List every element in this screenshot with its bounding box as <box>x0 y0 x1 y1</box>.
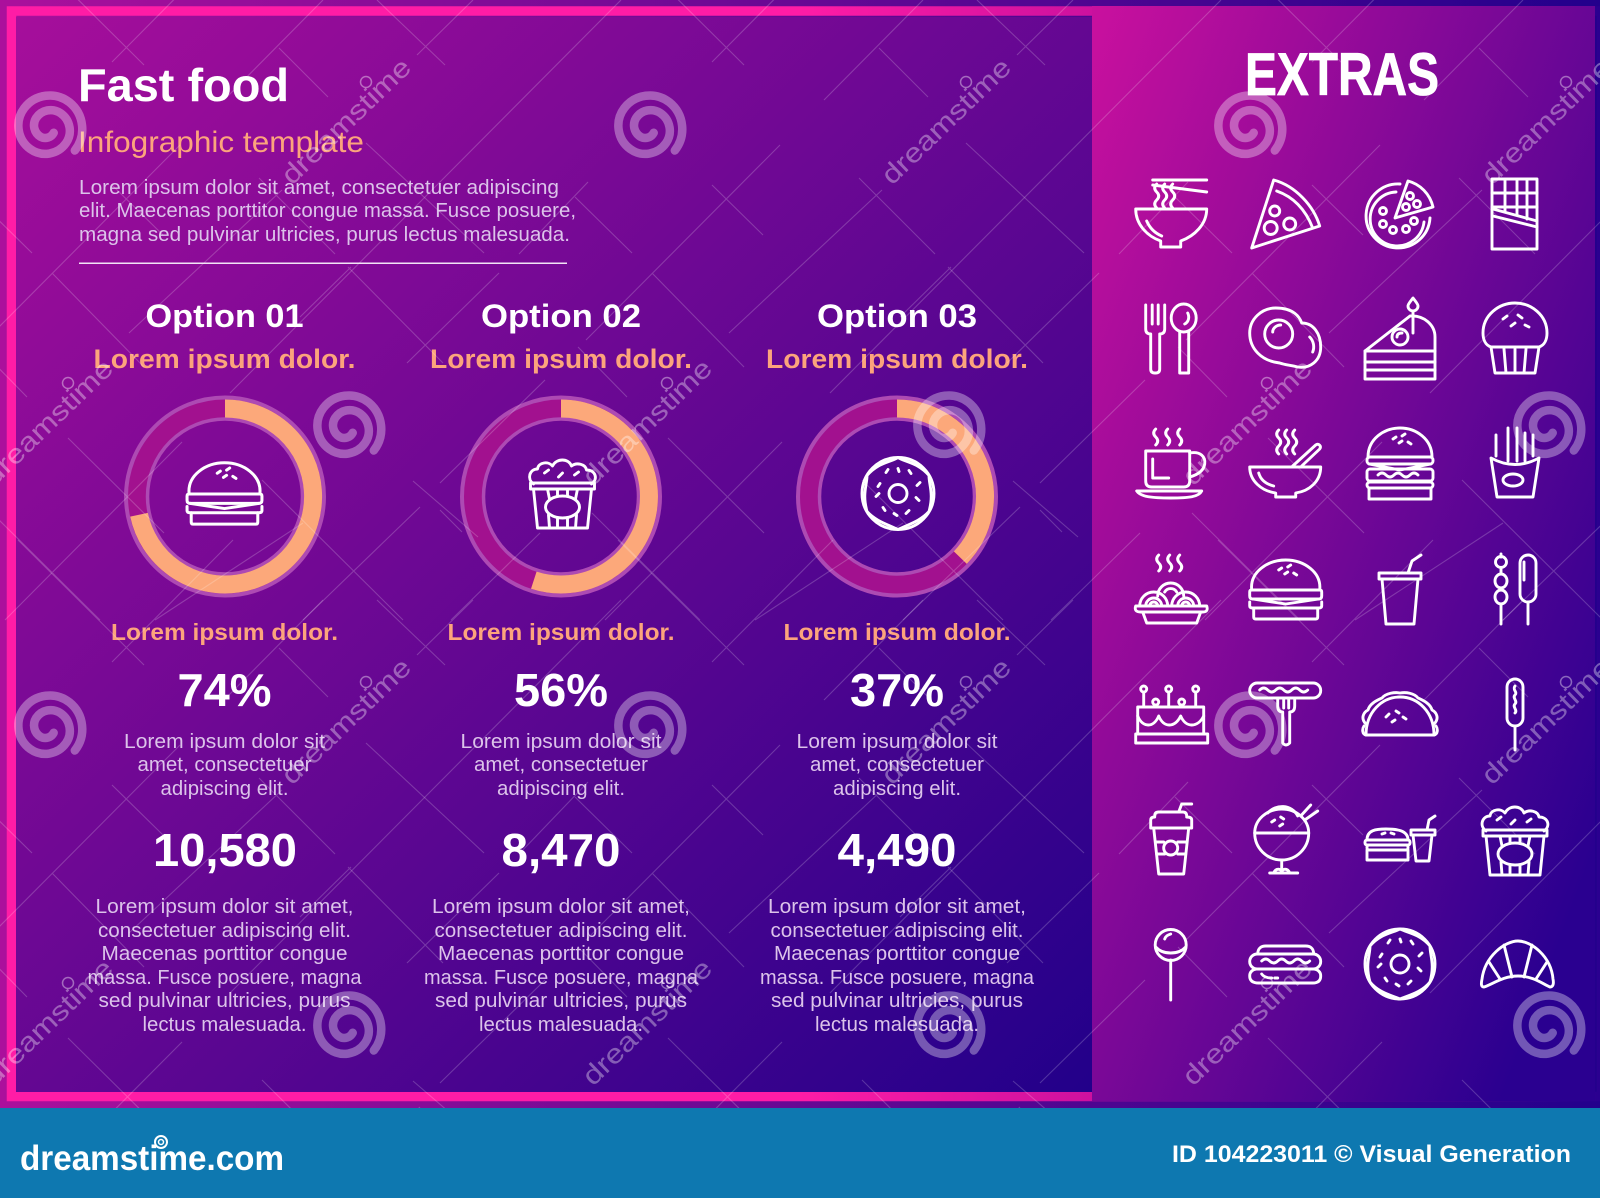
icon: chocolate bar <box>1492 179 1537 249</box>
panel: option 02 <box>424 298 699 1036</box>
option 01 caption: Lorem ipsum dolor. <box>111 619 338 645</box>
option 01 long text: sed pulvinar ultricies, purus <box>98 990 350 1012</box>
icon: burger and drink combo <box>1365 816 1435 861</box>
option 01 short text: Lorem ipsum dolor sit <box>124 731 325 753</box>
title: Fast food <box>78 59 289 111</box>
donut chart 74% <box>126 398 324 596</box>
intro paragraph: Lorem ipsum dolor sit amet, consectetuer adipiscing <box>79 177 559 199</box>
icon: ice cream sundae <box>1255 805 1318 873</box>
watermark overlay: dreamstime <box>576 353 718 491</box>
icon: skewer and corn dog <box>1495 554 1536 624</box>
option 01 short text: amet, consectetuer <box>138 754 312 776</box>
panel: extras icons <box>1135 179 1553 1000</box>
option 03 long text: massa. Fusce posuere, magna <box>760 967 1035 989</box>
panel: option 01 <box>88 298 362 1036</box>
icon: fork and spoon <box>1146 304 1196 373</box>
watermark overlay: dreamstime <box>275 52 417 190</box>
icon: birthday cake <box>1136 686 1208 743</box>
option 01 long text: massa. Fusce posuere, magna <box>88 967 362 989</box>
option 03 long text <box>760 896 1035 1036</box>
option 03 long text: Lorem ipsum dolor sit amet, <box>768 896 1026 918</box>
watermark overlay: dreamstime <box>1475 52 1600 190</box>
stat 4,490: 4,490 <box>838 824 956 876</box>
watermark overlay: dreamstime <box>1475 652 1600 790</box>
stat 10,580: 10,580 <box>153 824 297 876</box>
option 01 long text: Lorem ipsum dolor sit amet, <box>96 896 354 918</box>
stat 56%: 56% <box>514 664 608 716</box>
option 03 short text: adipiscing elit. <box>833 778 961 800</box>
icon: fried egg <box>1250 308 1321 367</box>
icon: pasta plate <box>1135 555 1207 623</box>
icon: soft drink <box>1379 555 1421 624</box>
icon: hot dog <box>1250 946 1321 983</box>
option 01 short text <box>124 731 325 800</box>
option 03 short text: amet, consectetuer <box>810 754 984 776</box>
option 01 subheading: Lorem ipsum dolor. <box>94 344 356 374</box>
watermark overlay: dreamstime <box>1176 953 1318 1091</box>
option 01 long text: consectetuer adipiscing elit. <box>98 920 351 942</box>
icon: pizza slice <box>1252 180 1320 248</box>
footer credit: ID 104223011 © Visual Generation <box>1172 1141 1571 1168</box>
option 03 short text <box>796 731 998 800</box>
option 03 short text: Lorem ipsum dolor sit <box>796 731 998 753</box>
option 02 short text: Lorem ipsum dolor sit <box>460 731 662 753</box>
option 02 subheading: Lorem ipsum dolor. <box>430 344 692 374</box>
option 02 long text: sed pulvinar ultricies, purus <box>435 990 687 1012</box>
option 01 heading: Option 01 <box>146 298 304 334</box>
icon: coffee cup <box>1137 429 1205 498</box>
watermark overlay: dreamstime <box>875 52 1017 190</box>
footer logo: dreamstime.com <box>20 1139 284 1178</box>
icon: takeaway cup <box>1151 804 1192 874</box>
icon: fries <box>1491 428 1539 497</box>
option 03 heading: Option 03 <box>817 298 977 334</box>
watermark overlay: dreamstime <box>875 652 1017 790</box>
icon: popcorn bucket <box>1482 807 1548 875</box>
icon: muffin <box>1483 303 1547 373</box>
icon: croissant <box>1481 941 1553 987</box>
donut chart 37% <box>798 398 996 596</box>
option 02 long text: lectus malesuada. <box>479 1014 643 1036</box>
intro paragraph <box>79 177 576 246</box>
option 02 long text: Maecenas porttitor congue <box>438 943 684 965</box>
icon: big burger <box>1367 428 1433 499</box>
icon: sausage on fork <box>1250 683 1321 745</box>
option 03 long text: Maecenas porttitor congue <box>774 943 1020 965</box>
watermark overlay: dreamstime <box>1176 353 1318 491</box>
option 02 long text: consectetuer adipiscing elit. <box>434 920 688 942</box>
icon: popcorn <box>530 460 595 528</box>
footer band <box>0 1108 1600 1198</box>
intro paragraph: elit. Maecenas porttitor congue massa. Fusce posuere, <box>79 200 576 222</box>
intro paragraph: magna sed pulvinar ultricies, purus lectus malesuada. <box>79 224 570 246</box>
panel: option 03 <box>760 298 1035 1036</box>
option 02 short text <box>460 731 662 800</box>
option 01 long text <box>88 896 362 1036</box>
donut chart 56% <box>462 398 660 596</box>
option 03 long text: lectus malesuada. <box>815 1014 979 1036</box>
watermark overlay: dreamstime <box>576 953 718 1091</box>
option 02 caption: Lorem ipsum dolor. <box>448 619 674 645</box>
heading: extras: EXTRAS <box>1245 41 1439 108</box>
icon: burger <box>187 463 262 524</box>
option 02 long text: Lorem ipsum dolor sit amet, <box>432 896 690 918</box>
subtitle: Infographic template <box>78 126 364 159</box>
icon: cake slice <box>1365 298 1435 379</box>
option 02 long text <box>424 896 699 1036</box>
option 01 long text: lectus malesuada. <box>142 1014 306 1036</box>
option 03 long text: sed pulvinar ultricies, purus <box>771 990 1023 1012</box>
stat 8,470: 8,470 <box>502 824 620 876</box>
option 03 long text: consectetuer adipiscing elit. <box>770 920 1024 942</box>
watermark overlay: dreamstime <box>275 652 417 790</box>
icon: pizza <box>1366 181 1433 248</box>
option 01 long text: Maecenas porttitor congue <box>102 943 348 965</box>
stat 74%: 74% <box>178 664 272 716</box>
icon: corn dog <box>1507 679 1523 750</box>
option 01 short text: adipiscing elit. <box>160 778 288 800</box>
icon: burger <box>1250 560 1322 619</box>
option 02 heading: Option 02 <box>481 298 641 334</box>
icon: soup bowl <box>1250 430 1321 497</box>
icon: donut <box>1365 929 1435 999</box>
option 02 short text: adipiscing elit. <box>497 778 625 800</box>
icon: lollipop <box>1155 930 1186 1000</box>
icon: donut <box>862 458 934 530</box>
option 02 long text: massa. Fusce posuere, magna <box>424 967 699 989</box>
option 03 subheading: Lorem ipsum dolor. <box>766 344 1028 374</box>
option 02 short text: amet, consectetuer <box>474 754 648 776</box>
stat 37%: 37% <box>850 664 944 716</box>
panel: extras background <box>1092 6 1595 1101</box>
option 03 caption: Lorem ipsum dolor. <box>784 619 1010 645</box>
panel: main infographic <box>16 17 1092 1092</box>
icon: taco <box>1363 693 1437 735</box>
icon: noodle bowl <box>1136 180 1207 247</box>
